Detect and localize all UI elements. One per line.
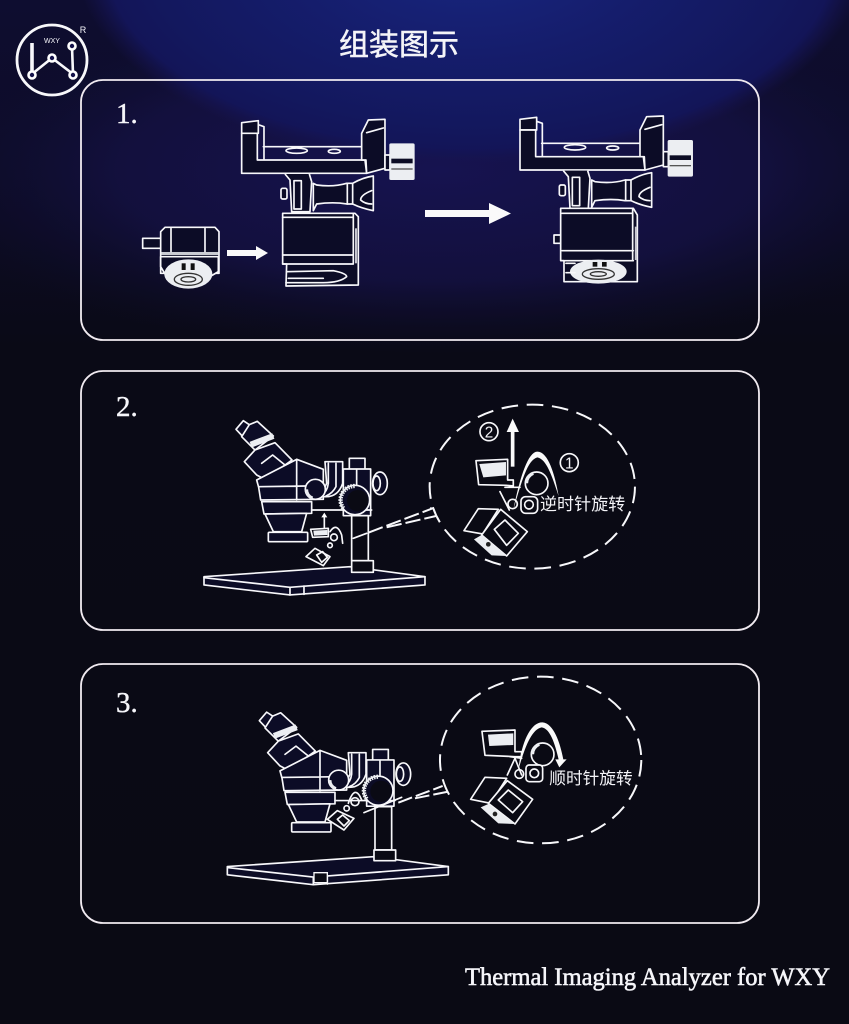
circled number 2: 2: [485, 424, 493, 441]
microscope with mount: [204, 421, 425, 595]
circled number 1: 1: [565, 455, 574, 472]
step number 3: 3.: [116, 687, 138, 719]
mount with camera, after: [520, 116, 693, 284]
magnified detail: tighten: [398, 677, 641, 843]
arrow: camera into box: [227, 246, 268, 260]
panel: step 3: [81, 664, 759, 923]
mount detail: [482, 730, 522, 757]
camera detail: [464, 509, 498, 534]
up arrow: [507, 431, 518, 467]
panel: step 1: [81, 80, 759, 340]
dashed ellipse: [440, 677, 641, 843]
dashed leader lines: [398, 786, 448, 803]
footer caption: Thermal Imaging Analyzer for WXY: [465, 964, 830, 991]
curved rotation arrow: [518, 722, 567, 770]
step number 2: 2.: [116, 391, 138, 423]
dashed leader lines: [368, 508, 436, 533]
background blue glow: [75, 0, 849, 165]
label: clockwise: 顺时针旋转: [549, 769, 633, 788]
title: 组装图示: [339, 29, 459, 62]
magnified detail: unscrew: [368, 405, 635, 569]
panel: step 2: [81, 371, 759, 630]
step number 1: 1.: [116, 98, 138, 130]
background navy haze: [0, 0, 849, 355]
circled number 1: [560, 454, 578, 472]
camera module: [143, 227, 219, 289]
logo: R: [80, 25, 87, 35]
mount with box, before: [242, 119, 415, 286]
arrow: result: [425, 203, 511, 224]
thumb screw: [521, 497, 538, 513]
logo: WXY: [44, 38, 60, 45]
thumb screw: [526, 765, 543, 782]
circled number 2: [480, 423, 498, 441]
curved rotation arrow: [513, 452, 559, 510]
dashed ellipse: [430, 405, 635, 569]
camera detail: [471, 777, 507, 803]
microscope with camera attached: [227, 712, 448, 885]
mount detail: [476, 459, 513, 486]
logo: [17, 25, 87, 95]
label: counter-clockwise: 逆时针旋转: [540, 495, 625, 514]
